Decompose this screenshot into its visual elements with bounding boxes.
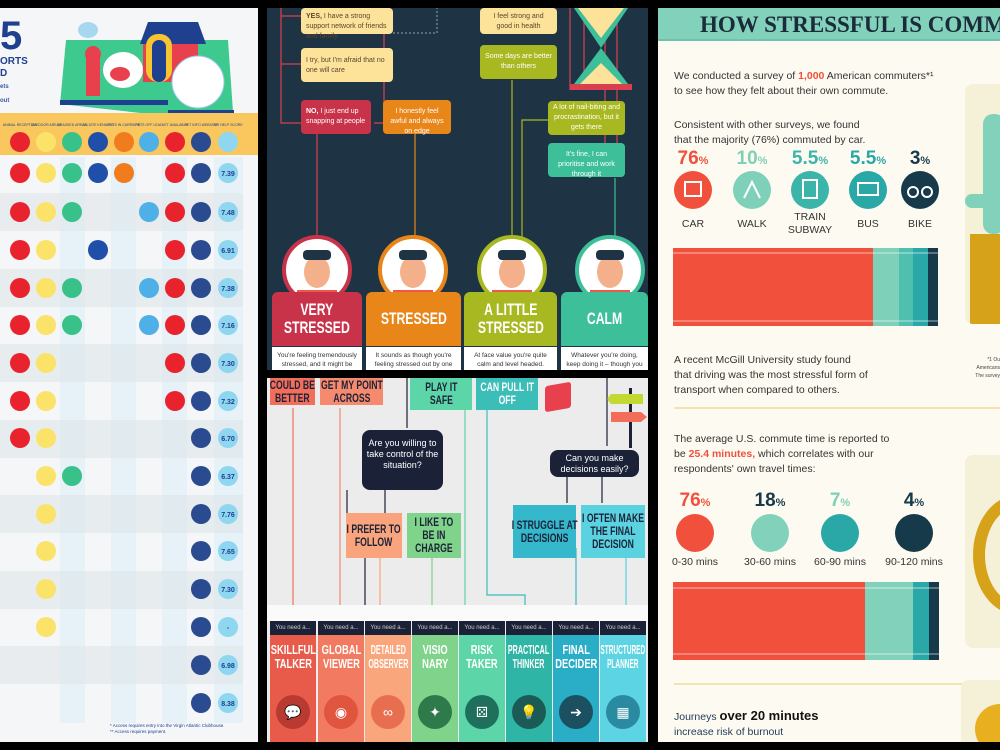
column: final decider: DECIDER <box>555 656 597 671</box>
stats: transport modes: SUBWAY <box>788 224 832 236</box>
question: take control <box>362 430 443 490</box>
panel: stress flowchart <box>267 8 648 370</box>
box: i try: I try, but I'm afraid that no one will care <box>306 57 385 74</box>
column: detailed observer: You need a... <box>370 625 406 631</box>
panel: commuting stress <box>658 8 1000 742</box>
table grid and icons: PETS IN CARRIERS <box>108 123 141 127</box>
white band <box>267 605 648 621</box>
table grid and icons: 7.32 <box>221 399 235 406</box>
column: detailed observer <box>365 621 411 742</box>
table grid and icons: VET AVAILABLE <box>162 123 189 127</box>
stats: commute times: 30-60 mins <box>744 556 796 568</box>
box: i try <box>301 48 393 82</box>
text: average commute: The average U.S. commute time is reported to <box>674 433 889 445</box>
card: a little stressed: STRESSED <box>478 318 543 337</box>
column: risk taker: TAKER <box>466 656 498 671</box>
panel: personality flowchart <box>267 378 648 742</box>
text: journeys over 20 minutes: Journeys over 20 minutes <box>674 708 819 723</box>
box: play it safe <box>410 378 472 410</box>
table grid and icons: 7.39 <box>221 171 235 178</box>
card: calm <box>561 292 648 346</box>
table grid and icons: 7.38 <box>221 286 235 293</box>
column: structured planner <box>600 621 646 742</box>
question: take control: Are you willing to take control of the situation? <box>367 438 438 470</box>
column: practical thinker: You need a... <box>511 625 547 631</box>
stats: commute times: 4% <box>904 490 924 511</box>
box: prefer to follow <box>346 513 402 558</box>
box: some days <box>480 45 557 79</box>
column: detailed observer: OBSERVER <box>368 656 408 671</box>
heading: airports title fragment: D <box>0 68 7 79</box>
column: final decider: FINAL <box>562 642 590 657</box>
stats: transport modes: BIKE <box>908 218 932 230</box>
column: practical thinker: THINKER <box>513 656 545 671</box>
column: risk taker: ⚄ <box>476 704 488 720</box>
footnote: * Access requires entry into the Virgin Atlantic Clubhouse. <box>110 723 224 728</box>
bar chart: commute time share <box>673 582 939 660</box>
footnote: survey: *1 Ou <box>987 357 1000 363</box>
stats: transport modes: 76% <box>678 148 708 169</box>
box: struggle: I STRUGGLE AT <box>512 518 577 532</box>
card: calm: CALM <box>587 309 622 328</box>
box: could be better: BETTER <box>275 390 310 404</box>
column: final decider: You need a... <box>558 625 594 631</box>
card descriptions: You're feeling tremendously stressed, and it might be <box>277 352 357 368</box>
text: journeys over 20 minutes: increase risk of burnout <box>674 726 783 738</box>
illustration: commuter figure <box>965 84 1000 324</box>
column: skillful talker: SKILLFUL <box>270 642 316 657</box>
text: average commute: respondents' own travel times: <box>674 463 816 475</box>
text: mcgill study: that driving was the most stressful form of <box>674 369 868 381</box>
text: majority by car: that the majority (76%) commuted by car. <box>674 134 865 146</box>
column: practical thinker: PRACTICAL <box>508 642 550 657</box>
box: yes support: YES, I have a strong support network of friends and family <box>306 13 387 40</box>
text: survey intro <box>674 70 934 97</box>
illustration: steering wheel <box>965 455 1000 648</box>
box: yes support <box>301 8 393 34</box>
avatars <box>282 235 645 292</box>
table grid and icons: - <box>227 625 230 632</box>
bar chart: transport share <box>673 248 938 326</box>
result columns <box>270 621 646 742</box>
stats: commute times: 60-90 mins <box>814 556 866 568</box>
stats: transport modes: CAR <box>682 218 704 230</box>
box: get my point across: ACROSS <box>333 390 370 404</box>
box: play it safe: SAFE <box>429 393 453 407</box>
column: global viewer <box>318 621 364 742</box>
question: decisions <box>550 450 639 477</box>
question: decisions: Can you make decisions easily? <box>560 453 629 474</box>
card: stressed <box>366 292 461 346</box>
column: practical thinker: 💡 <box>520 704 538 720</box>
table grid and icons: 7.65 <box>221 549 235 556</box>
panel: airports pet table <box>0 8 258 742</box>
column: structured planner: You need a... <box>605 625 641 631</box>
box: get my point across <box>320 378 383 405</box>
column: global viewer: You need a... <box>323 625 359 631</box>
text: survey intro: to see how they felt about their own commute. <box>674 85 888 97</box>
stats: transport modes: 5.5% <box>850 148 886 169</box>
icon: hourglass <box>570 8 632 90</box>
text: majority by car <box>674 119 865 146</box>
table header band <box>0 113 258 155</box>
stats: transport modes: 5.5% <box>792 148 828 169</box>
text: survey intro: We conducted a survey of 1,000 American commuters*¹ <box>674 70 934 82</box>
box: final decision: THE FINAL <box>590 524 636 538</box>
box: struggle: DECISIONS <box>521 530 568 544</box>
column: global viewer: GLOBAL <box>321 642 361 657</box>
text: average commute: be 25.4 minutes, which correlates with our <box>674 448 874 460</box>
box: strong health: I feel strong and good in health <box>493 13 544 30</box>
table grid and icons: PETS OFF LEAD <box>135 123 163 127</box>
box: prefer to follow: FOLLOW <box>355 534 393 548</box>
card descriptions <box>272 347 648 370</box>
heading: airports title fragment: out <box>0 98 9 104</box>
footnote: ** Access requires payment. <box>110 729 166 734</box>
column: final decider <box>553 621 599 742</box>
column: visionary: NARY <box>422 656 448 671</box>
table grid and icons <box>0 123 243 723</box>
card: very stressed: STRESSED <box>284 318 350 337</box>
box: struggle <box>513 505 576 558</box>
stats: transport modes: 3% <box>910 148 930 169</box>
connector lines <box>280 8 618 237</box>
column: skillful talker: 💬 <box>284 704 302 720</box>
column: visionary <box>412 621 458 742</box>
card descriptions: It sounds as though you're feeling stressed out by one <box>375 352 452 368</box>
card: a little stressed: A LITTLE <box>484 300 537 319</box>
stats: transport modes: BUS <box>857 218 879 230</box>
table grid and icons: 6.37 <box>221 474 235 481</box>
box: its fine <box>548 143 625 177</box>
table grid and icons: 7.30 <box>221 361 235 368</box>
box: honestly awful: I honestly feel awful and always on edge <box>390 108 444 135</box>
stats: transport modes: WALK <box>737 218 767 230</box>
table grid and icons: 7.16 <box>221 323 235 330</box>
footnote: survey: The survey <box>975 373 1000 379</box>
table grid and icons: GRASSED AREAS <box>57 123 88 127</box>
card: stressed: STRESSED <box>381 309 446 328</box>
column: detailed observer: DETAILED <box>370 642 406 657</box>
table grid and icons: PET INFO WEBSITE <box>185 123 218 127</box>
box: final decision <box>581 505 645 558</box>
box: final decision: DECISION <box>592 537 634 551</box>
column: global viewer: VIEWER <box>323 656 359 671</box>
box: can pull it off <box>476 378 538 410</box>
footnote: survey: Americans <box>976 365 1000 371</box>
table grid and icons: ON-SITE KENNELS <box>82 123 114 127</box>
column: structured planner: PLANNER <box>607 656 639 671</box>
heading: airports title fragment: 5 <box>0 14 22 58</box>
card: very stressed <box>272 292 362 346</box>
box: some days: Some days are better than others <box>485 53 552 70</box>
text: majority by car: Consistent with other surveys, we found <box>674 119 860 131</box>
box: like to be in charge: I LIKE TO <box>415 515 453 529</box>
icon: dice <box>545 382 571 412</box>
column: global viewer: ◉ <box>335 704 347 720</box>
stats: transport modes <box>674 148 939 236</box>
box: could be better <box>270 378 315 405</box>
stats: commute times: 7% <box>830 490 850 511</box>
column: practical thinker <box>506 621 552 742</box>
table grid and icons: 7.76 <box>221 512 235 519</box>
stats: transport modes: TRAIN <box>794 211 826 223</box>
table grid and icons: AIR HELP SCORE <box>213 123 243 127</box>
table grid and icons: 6.91 <box>221 248 235 255</box>
box: no snapping: NO, I just end up snapping at people <box>306 108 365 125</box>
column: structured planner: STRUCTURED <box>601 642 645 657</box>
box: nail biting <box>548 101 625 135</box>
column: risk taker: You need a... <box>464 625 500 631</box>
box: prefer to follow: I PREFER TO <box>347 522 401 536</box>
card descriptions: At face value you're quite calm and level headed. <box>474 352 547 368</box>
box: strong health <box>480 8 557 34</box>
box: final decision: I OFTEN MAKE <box>582 511 644 525</box>
table grid and icons: ANIMAL RECEPTION <box>3 123 38 127</box>
stats: commute times: 76% <box>680 490 710 511</box>
column: risk taker: RISK <box>471 642 493 657</box>
card: a little stressed <box>464 292 557 346</box>
table grid and icons: 7.30 <box>221 587 235 594</box>
column: skillful talker <box>270 621 316 742</box>
icon: signpost <box>607 388 647 448</box>
box: like to be in charge <box>407 513 461 558</box>
column: visionary: ✦ <box>429 704 441 720</box>
column: risk taker <box>459 621 505 742</box>
heading: airports title fragment: ORTS <box>0 56 28 67</box>
stats: commute times: 18% <box>755 490 785 511</box>
text: mcgill study: A recent McGill University study found <box>674 354 851 366</box>
table grid and icons: 7.48 <box>221 210 235 217</box>
text: mcgill study: transport when compared to others. <box>674 384 840 396</box>
column: detailed observer: ∞ <box>383 704 393 720</box>
column: skillful talker: You need a... <box>275 625 311 631</box>
stats: transport modes: 10% <box>737 148 767 169</box>
box: like to be in charge: BE IN <box>422 528 446 542</box>
connector lines <box>292 378 627 605</box>
text: mcgill study <box>674 354 868 396</box>
text: average commute <box>674 433 889 475</box>
table grid and icons: 6.70 <box>221 436 235 443</box>
stats: commute times <box>672 490 943 568</box>
box: its fine: It's fine, I can prioritise and work through it <box>558 151 615 178</box>
box: like to be in charge: CHARGE <box>415 541 453 555</box>
card: very stressed: VERY <box>301 300 333 319</box>
column: structured planner: ▦ <box>616 704 630 720</box>
table grid and icons: 8.38 <box>221 701 235 708</box>
illustration: dogs and kennel <box>60 22 234 113</box>
heading: airports title fragment <box>0 14 28 104</box>
stats: commute times: 90-120 mins <box>885 556 943 568</box>
column: skillful talker: TALKER <box>274 656 312 671</box>
column: final decider: ➔ <box>570 704 582 720</box>
footnote <box>110 723 224 734</box>
stats: commute times: 0-30 mins <box>672 556 718 568</box>
title band <box>658 8 1000 41</box>
box: can pull it off: OFF <box>498 393 516 407</box>
heading: airports title fragment: ets <box>0 84 9 90</box>
text: journeys over 20 minutes <box>674 708 819 742</box>
footnote: survey <box>975 357 1000 379</box>
table grid and icons: 6.98 <box>221 663 235 670</box>
box: play it safe: PLAY IT <box>425 380 457 394</box>
column: visionary: VISIO <box>422 642 447 657</box>
column: visionary: You need a... <box>417 625 453 631</box>
box: nail biting: A lot of nail-biting and procrastination, but it gets there <box>553 104 620 131</box>
box: can pull it off: CAN PULL IT <box>480 380 534 394</box>
table grid and icons: OUTDOOR AREAS <box>31 123 62 127</box>
box: no snapping <box>301 100 371 134</box>
illustration: bottom figure <box>961 680 1000 742</box>
box: honestly awful <box>383 100 451 134</box>
